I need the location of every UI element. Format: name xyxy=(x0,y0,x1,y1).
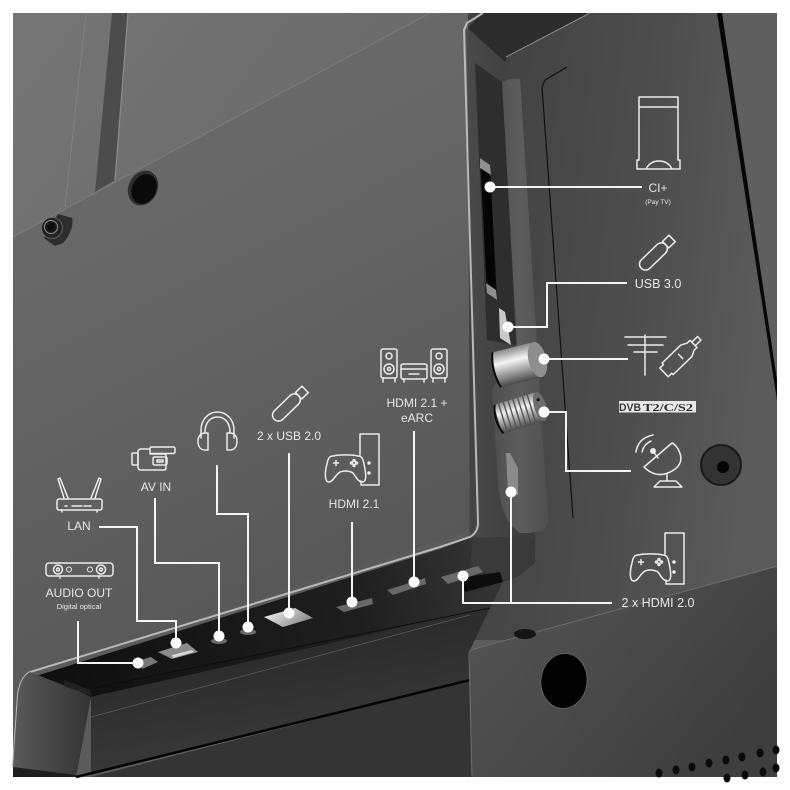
right wall screw xyxy=(701,445,741,485)
port: HDMI 2.1 xyxy=(336,598,373,612)
logo: DVB T2/C/S2: T2/C/S2 xyxy=(643,402,694,414)
label: AUDIO OUT: AUDIO OUT xyxy=(46,586,113,600)
port: HDMI 2.0 bottom xyxy=(441,566,483,584)
icon: satellite dish xyxy=(636,435,682,487)
icon: speakers and receiver xyxy=(381,349,447,382)
label: Digital optical: Digital optical xyxy=(57,602,102,611)
icon: antenna xyxy=(625,335,666,375)
connector line: headphones xyxy=(217,465,254,632)
connector line: USB 3.0 xyxy=(502,283,627,332)
port: vertical HDMI xyxy=(506,453,518,495)
ventilation holes xyxy=(656,746,780,782)
panel hole xyxy=(538,651,590,711)
label: 2 x HDMI 2.0: 2 x HDMI 2.0 xyxy=(622,596,695,610)
label: AV IN: AV IN xyxy=(141,480,171,494)
icon: coax plug xyxy=(658,333,705,378)
side frame xyxy=(13,13,590,767)
port: LAN xyxy=(158,643,198,659)
mounting hole xyxy=(122,166,164,210)
label: CI+: CI+ xyxy=(648,181,668,195)
connector line: audio out xyxy=(78,621,144,668)
connector line: CI+ xyxy=(484,182,642,192)
port: satellite threaded connector xyxy=(492,390,550,434)
connector line: LAN xyxy=(99,527,182,648)
left corner cap xyxy=(13,672,92,777)
port: USB 2.0 xyxy=(264,608,313,627)
icon: video camera xyxy=(132,447,175,470)
port: antenna coax connector xyxy=(489,340,551,388)
connector line: antenna xyxy=(538,354,628,364)
port: headphone jack xyxy=(240,629,256,635)
port: optical xyxy=(140,657,158,669)
connector line: HDMI 2.1 eARC xyxy=(408,431,420,588)
port: AV in jack xyxy=(211,638,227,644)
label: 2 x USB 2.0: 2 x USB 2.0 xyxy=(257,429,321,443)
bottom right stand panel xyxy=(469,566,777,777)
connector line: HDMI 2.1 xyxy=(346,522,358,608)
connector line: 2 x USB 2.0 xyxy=(284,453,294,618)
port: CI slot xyxy=(480,158,497,300)
label: USB 3.0: USB 3.0 xyxy=(635,277,681,291)
upper rear panel with bracket xyxy=(13,13,430,237)
icon: game console center xyxy=(325,434,379,485)
icon: game console right xyxy=(630,533,684,584)
port: USB 3.0 xyxy=(499,308,511,345)
lower port strip xyxy=(36,536,535,777)
icon: CI card xyxy=(637,97,680,169)
icon: USB stick xyxy=(637,234,676,273)
connector line: 2 x HDMI 2.0 xyxy=(458,486,612,603)
connector line: satellite xyxy=(538,406,631,471)
logo: DVB T2/C/S2: DVB xyxy=(619,402,641,414)
label: HDMI 2.1 + eARC: HDMI 2.1 + xyxy=(386,396,448,410)
connector line: AV IN xyxy=(155,498,224,642)
right recessed rear area xyxy=(468,13,777,640)
stand screw xyxy=(42,214,73,246)
label: HDMI 2.1 + eARC xyxy=(386,396,448,425)
logo: DVB T2/C/S2 xyxy=(619,401,696,414)
label: LAN: LAN xyxy=(67,519,91,533)
label: HDMI 2.1 + eARC: eARC xyxy=(401,411,433,425)
icon: soundbar xyxy=(46,563,113,578)
port: HDMI 2.1 eARC xyxy=(387,578,426,595)
icon: headphones xyxy=(198,412,237,450)
icon: USB stick small xyxy=(270,385,309,424)
label: Pay TV: (Pay TV) xyxy=(645,199,671,206)
icon: router xyxy=(57,478,102,512)
label: HDMI 2.1: HDMI 2.1 xyxy=(329,497,380,511)
